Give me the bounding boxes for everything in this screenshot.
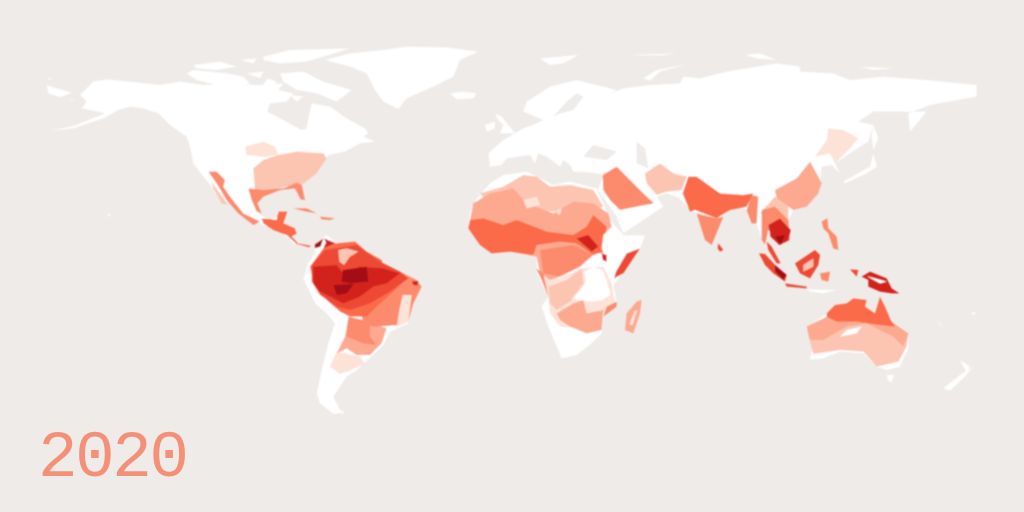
islands: New Zealand — [943, 360, 973, 391]
heat: Sahara — [480, 175, 603, 213]
Sahara pale patches — [523, 197, 562, 215]
year label: 2020 — [38, 421, 186, 496]
heat: southern United States — [245, 142, 278, 157]
region: Eurasia — [485, 53, 977, 247]
heat: Mozambique coast — [603, 302, 617, 317]
heat: eastern Brazil — [360, 272, 422, 327]
heat: Paraguay band — [337, 318, 387, 355]
heat: Horn of Africa — [614, 248, 640, 278]
landmass: South America — [303, 235, 422, 414]
heat: Arabia — [603, 167, 654, 210]
heat: China — [775, 162, 822, 210]
heat: Gran Chaco pale — [330, 352, 365, 374]
region: Africa — [468, 172, 645, 358]
region: North America and Greenland — [47, 47, 478, 247]
heat: Thailand and Cambodia core — [768, 218, 791, 245]
island: Tasmania — [887, 375, 894, 382]
central Australia pale patch — [840, 327, 862, 337]
Guiana highlands patch — [338, 248, 358, 265]
seas: Black Sea, Caspian, Baltic, Persian Gulf — [553, 93, 650, 202]
heat: northern Indochina — [760, 197, 788, 220]
peninsula: Malaya — [767, 242, 781, 263]
island: Sri Lanka — [718, 243, 723, 252]
heat: Amazon basin core — [313, 265, 400, 303]
heat: Burma — [747, 195, 758, 223]
heat: northern Australia — [827, 297, 895, 327]
region: South America — [303, 235, 422, 414]
landmass: Eurasia — [488, 63, 977, 247]
east African white patch — [573, 267, 611, 302]
islands: New Caledonia and Fiji — [937, 312, 977, 327]
heat: north-east China — [815, 128, 858, 163]
islands: Philippines — [822, 218, 838, 250]
island: Sulawesi — [820, 272, 830, 282]
heat: South Sudan core — [577, 235, 598, 252]
heat: south-central Africa — [548, 268, 583, 310]
heat: western Mexico — [208, 172, 260, 225]
island: Borneo — [795, 250, 820, 278]
region: South-East Asia and Oceania — [718, 218, 977, 391]
landmass: Africa — [468, 172, 645, 358]
heat: southern Australia — [807, 317, 908, 367]
landmass: Great Britain and Ireland — [485, 113, 515, 133]
island: Sumatra — [759, 253, 787, 282]
landmass: North America — [50, 79, 375, 247]
island: New Guinea — [850, 269, 858, 277]
heat: Amazon basin outer — [310, 242, 407, 317]
landmass: Australia — [806, 297, 908, 370]
heat: Central America — [262, 212, 312, 247]
heat: Gabon coast — [536, 268, 548, 297]
island: Java and Sunda — [785, 283, 807, 288]
landmass: Sakhalin and Japan — [843, 125, 878, 183]
heat: Caribbean islands — [293, 208, 335, 220]
heat: Iran and Afghanistan — [645, 163, 687, 195]
arctic islands — [187, 48, 352, 102]
heat: Indochina — [762, 207, 790, 245]
heat: Sahel band — [468, 215, 607, 255]
heat: Amazon basin middle — [312, 245, 408, 310]
landmass: Greenland — [325, 47, 478, 109]
heat: north-east Brazil spot — [412, 281, 418, 286]
heat: Baja — [212, 182, 228, 205]
landmass: Madagascar — [625, 300, 642, 333]
heat: central-southern pale wash — [540, 267, 615, 330]
heat: northern India — [683, 177, 753, 218]
heat: central Africa — [540, 245, 593, 277]
heat: central Australia — [807, 313, 908, 347]
arctic islands — [540, 53, 893, 81]
heat: Colombia north — [315, 238, 323, 248]
heat: east African highlands — [602, 227, 617, 260]
heat: southern India — [697, 213, 723, 245]
Alaska peninsula islands — [47, 78, 112, 217]
heat: Gulf coast and Florida — [248, 183, 305, 213]
heat: Amazon darkest — [333, 267, 368, 295]
landmass: Iceland — [450, 92, 477, 99]
